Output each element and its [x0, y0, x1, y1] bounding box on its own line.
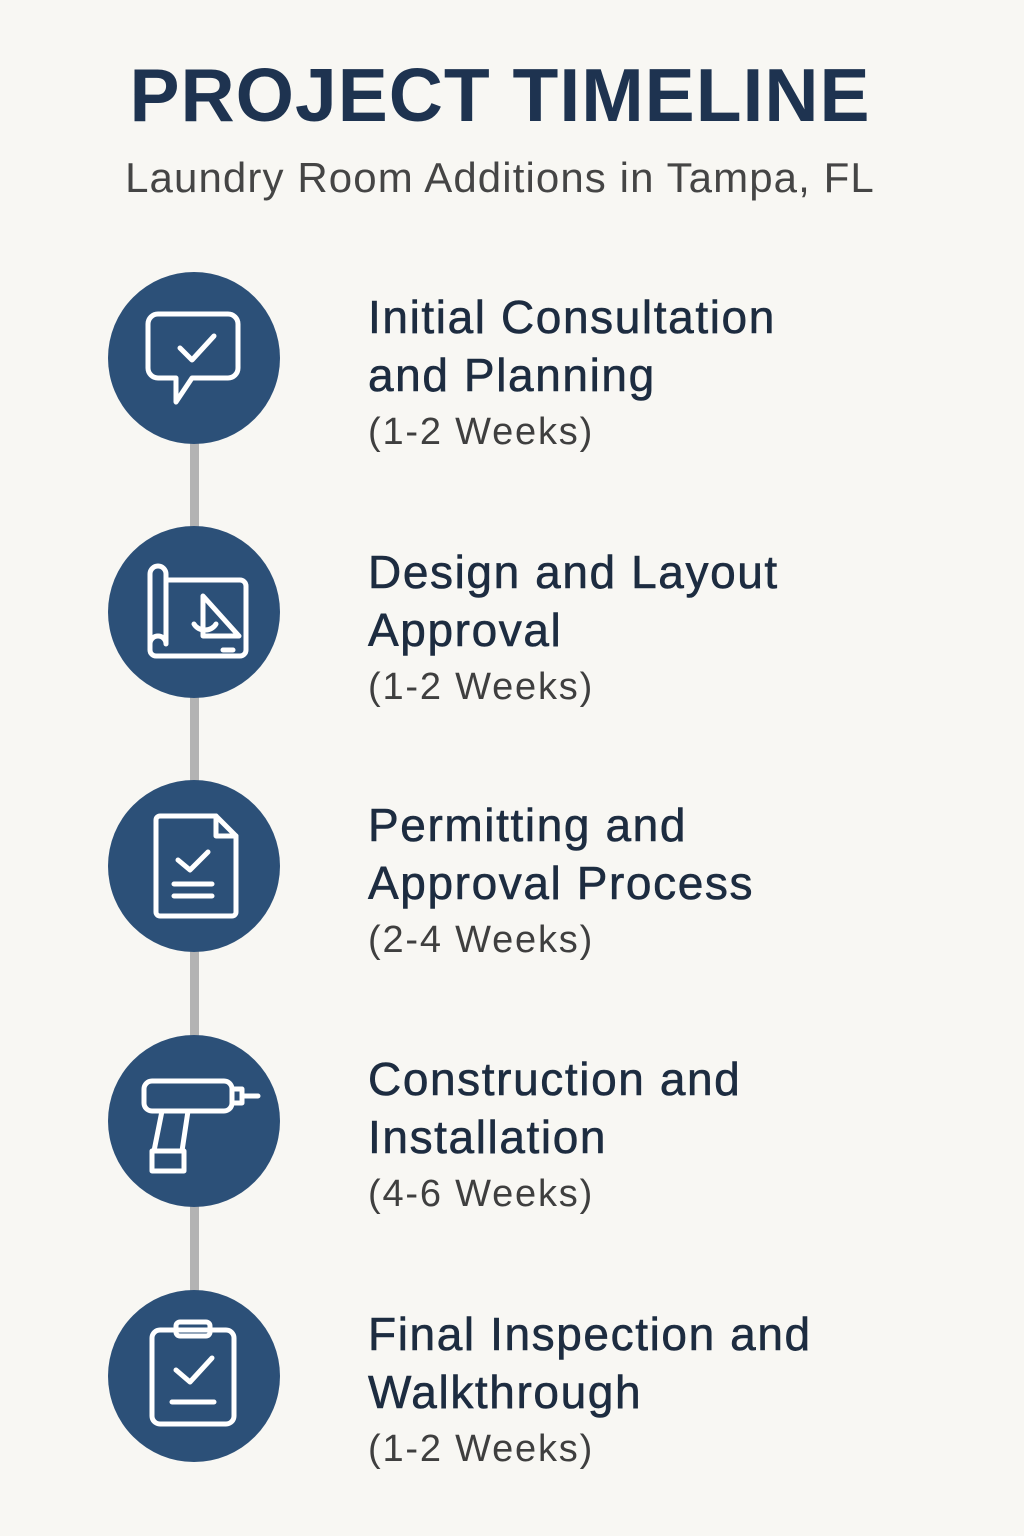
- step 1 text: [368, 291, 776, 453]
- icon: chat check: [108, 272, 280, 444]
- step 5 text: Walkthrough: [368, 1366, 642, 1418]
- step 5 text: Final Inspection and: [368, 1308, 812, 1360]
- step 5 text: [368, 1308, 812, 1470]
- step 4 text: Construction and: [368, 1053, 741, 1105]
- step 2 text: Approval: [368, 604, 562, 656]
- icon: blueprint: [108, 526, 280, 698]
- icon: document check: [108, 780, 280, 952]
- step 2 text: (1-2 Weeks): [368, 666, 594, 708]
- icon: clipboard check: [108, 1290, 280, 1462]
- step 2 text: Design and Layout: [368, 546, 779, 598]
- step 4 text: [368, 1053, 741, 1215]
- connector line: [190, 440, 199, 1300]
- step 4 text: Installation: [368, 1111, 607, 1163]
- step 3 text: Approval Process: [368, 857, 754, 909]
- step 2 text: [368, 546, 779, 708]
- step 3 text: (2-4 Weeks): [368, 919, 594, 961]
- step 1 text: (1-2 Weeks): [368, 411, 594, 453]
- title: PROJECT TIMELINE: [129, 53, 871, 137]
- step 3 text: [368, 799, 754, 961]
- step 4 text: (4-6 Weeks): [368, 1173, 594, 1215]
- subtitle: Laundry Room Additions in Tampa, FL: [125, 154, 875, 201]
- step 1 text: and Planning: [368, 349, 656, 401]
- step 3 text: Permitting and: [368, 799, 687, 851]
- step 1 text: Initial Consultation: [368, 291, 776, 343]
- step 5 text: (1-2 Weeks): [368, 1428, 594, 1470]
- icon: drill: [108, 1035, 280, 1207]
